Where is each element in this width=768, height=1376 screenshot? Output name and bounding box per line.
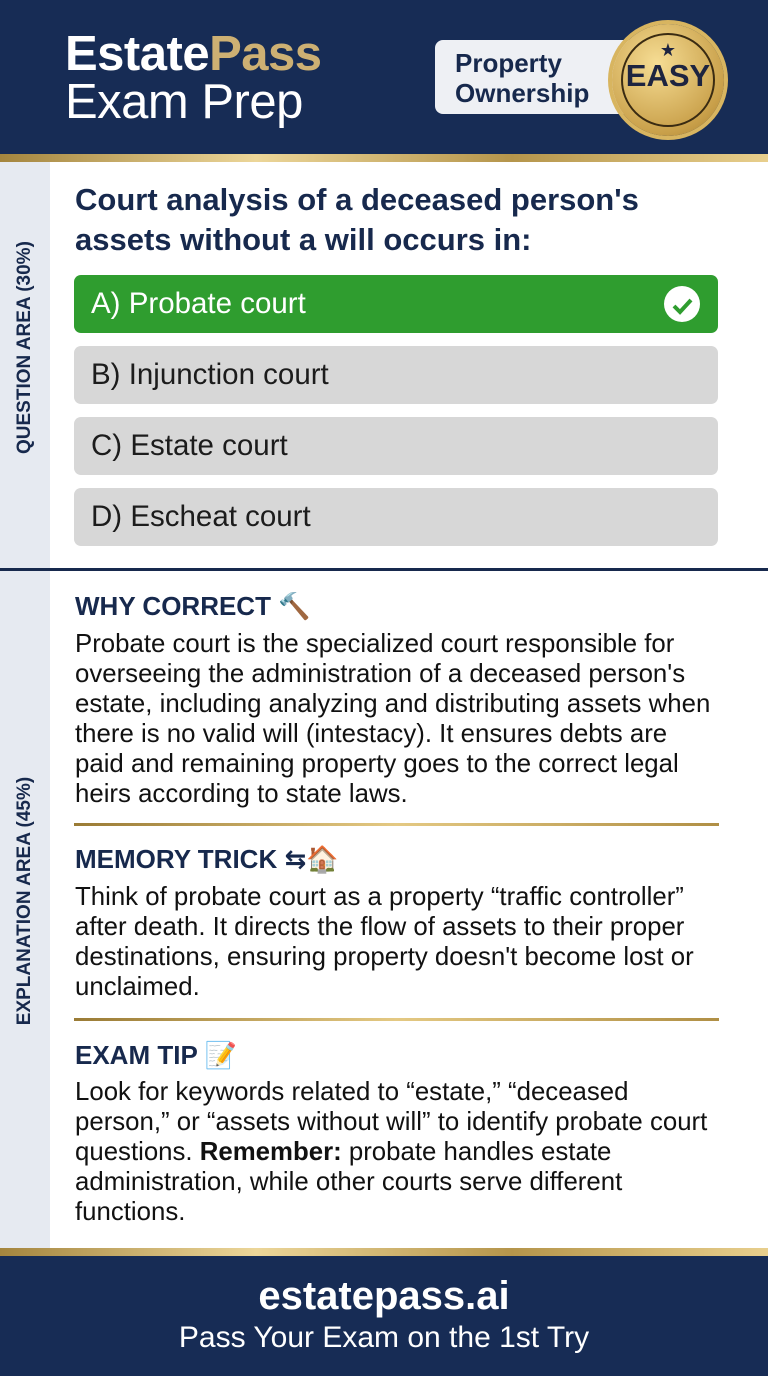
title: Exam Prep (65, 75, 303, 129)
heading: why correct: WHY CORRECT 🔨 (75, 591, 311, 621)
option A correct (74, 275, 718, 333)
option C: C) Estate court (91, 429, 288, 462)
sidebar: explanation (0, 571, 50, 1248)
heading: exam tip: EXAM TIP 📝 (75, 1040, 237, 1070)
option B (74, 346, 718, 404)
sidebar label: explanation: EXPLANATION AREA (45%) (14, 777, 35, 1025)
text: exam tip: Look for keywords related to “estate,” “deceased person,” or “assets without will” to identify probate court questions. Remember: probate handles estate administration, while other courts serve different functions. (75, 1078, 707, 1226)
gold band (0, 154, 768, 162)
option C (74, 417, 718, 475)
option D: D) Escheat court (91, 500, 311, 533)
option B: B) Injunction court (91, 358, 329, 391)
question: Court analysis of a deceased person's (75, 182, 639, 217)
text: why correct: Probate court is the specialized court responsible for overseeing the administration of a deceased person's estate, including analyzing and distributing assets when there is no valid will (intestacy). It ensures debts are paid and remaining property goes to the correct legal heirs according to state laws. (75, 630, 710, 808)
difficulty seal: ★ (660, 40, 676, 60)
gold band (0, 1248, 768, 1256)
sidebar: question (0, 162, 50, 568)
divider (0, 568, 768, 571)
topic badge: Property (455, 48, 562, 78)
topic badge: Ownership (455, 78, 589, 108)
sidebar label: question: QUESTION AREA (30%) (14, 241, 35, 454)
tagline: Pass Your Exam on the 1st Try (179, 1321, 589, 1354)
option D (74, 488, 718, 546)
title (65, 27, 322, 129)
difficulty seal (612, 24, 724, 136)
question: assets without a will occurs in: (75, 222, 532, 257)
icon: check (664, 286, 700, 322)
heading: memory trick: MEMORY TRICK ⇆🏠 (75, 844, 339, 874)
difficulty seal: EASY (626, 58, 710, 93)
footer (0, 1256, 768, 1376)
text: memory trick: Think of probate court as a property “traffic controller” after death. It directs the flow of assets to their proper destinations, ensuring property doesn't become lost or unclaimed. (75, 883, 694, 1001)
option A correct: A) Probate court (91, 287, 306, 320)
topic badge (435, 40, 635, 114)
question (75, 182, 639, 257)
footer url: estatepass.ai (258, 1274, 510, 1318)
title: EstatePass (65, 27, 322, 81)
header (0, 0, 768, 155)
